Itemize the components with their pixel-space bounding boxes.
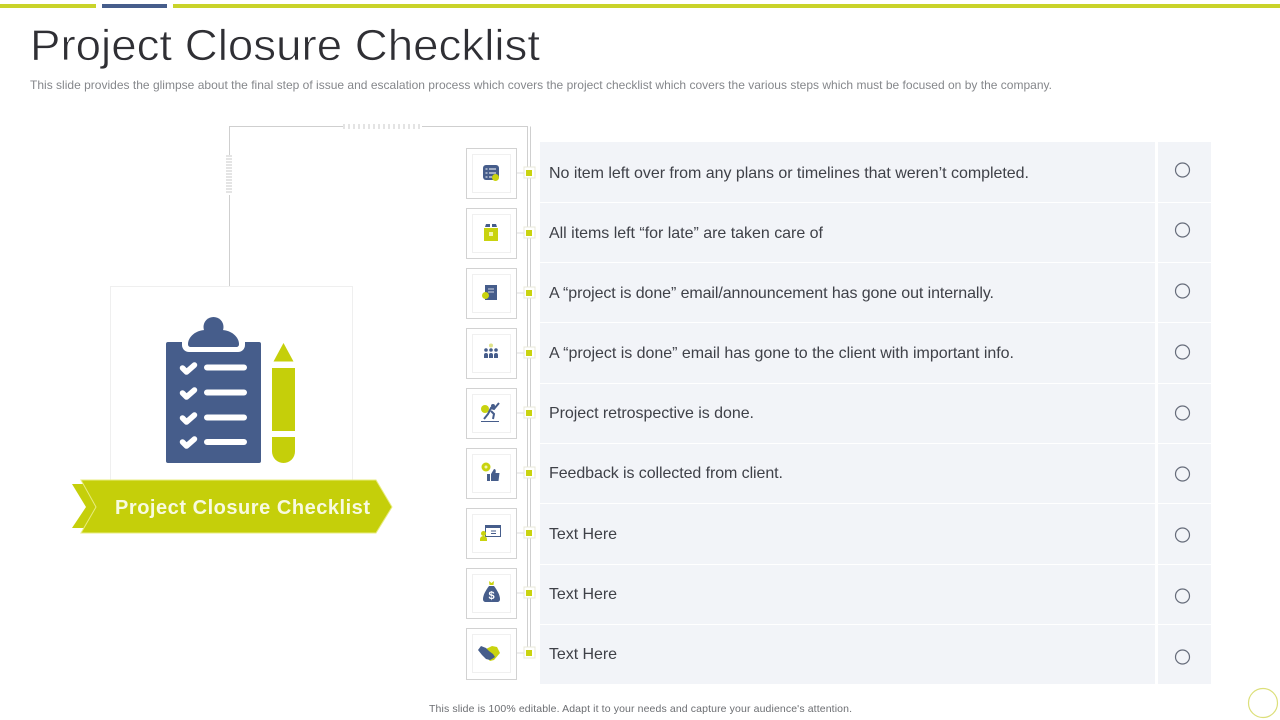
checklist row 5: Project retrospective is done. <box>549 405 754 422</box>
checklist row 8: Text Here <box>549 586 617 603</box>
checklist row 6: Feedback is collected from client. <box>549 465 783 482</box>
top accent bar <box>0 4 1280 8</box>
icon: person with id card <box>480 525 501 541</box>
checklist row 4: A “project is done” email has gone to the client with important info. <box>549 345 1014 362</box>
icon: task list <box>483 165 499 181</box>
checklist row 6 <box>466 444 1211 503</box>
checklist row 7: Text Here <box>549 526 617 543</box>
icon: handshake <box>478 646 500 661</box>
icon: package <box>484 224 498 241</box>
checklist row 9 <box>466 625 1211 684</box>
checklist row 7 <box>466 504 1211 564</box>
banner label: Project Closure Checklist <box>115 497 370 519</box>
subtitle: This slide provides the glimpse about the final step of issue and escalation process which covers the project checklist which covers the various steps which must be focused on by the company. <box>30 78 1052 92</box>
icon: runner with stopwatch <box>481 403 499 422</box>
checklist row 5 <box>466 384 1211 443</box>
corner circle <box>1248 688 1278 718</box>
title: Project Closure Checklist <box>30 21 540 70</box>
icon: money bag <box>483 581 500 602</box>
checklist row 4 <box>466 323 1211 383</box>
checklist row 8 <box>466 565 1211 624</box>
checklist row 2 <box>466 203 1211 262</box>
icon: thumbs up feedback <box>482 462 500 481</box>
icon: money bag: $ <box>488 590 495 602</box>
connector lines <box>226 124 530 653</box>
banner <box>72 480 392 533</box>
checklist row 2: All items left “for late” are taken care of <box>549 225 824 242</box>
checklist row 9: Text Here <box>549 646 617 663</box>
panel: clipboard illustration <box>110 286 352 480</box>
checklist row 3: A “project is done” email/announcement has gone out internally. <box>549 285 994 302</box>
checklist row 1 <box>466 142 1211 202</box>
checklist row 1: No item left over from any plans or timelines that weren’t completed. <box>549 165 1029 182</box>
icon: clipboard with pencil <box>166 317 295 463</box>
checklist row 3 <box>466 263 1211 322</box>
footer note: This slide is 100% editable. Adapt it to your needs and capture your audience's attention. <box>429 703 852 715</box>
icon: clipboard badge <box>482 285 497 300</box>
icon: team <box>484 344 498 358</box>
